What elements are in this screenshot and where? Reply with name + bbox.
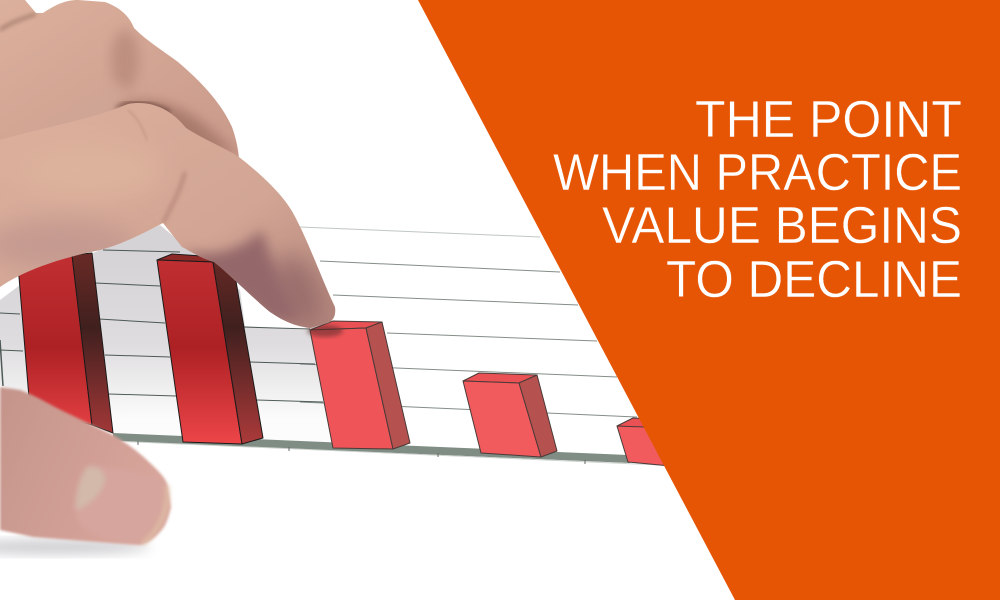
finger: pointing on chart [0, 103, 335, 335]
title: VALUE BEGINS [602, 197, 962, 255]
thumb nail tip [142, 485, 167, 544]
finger: upper knuckle [0, 0, 239, 158]
title: TO DECLINE [666, 251, 962, 309]
finger shadow on bar 3 [307, 325, 343, 337]
shaded paper under hand [0, 225, 333, 448]
baseline band [113, 433, 630, 463]
thumb [0, 387, 171, 545]
orange diagonal panel [418, 0, 1000, 600]
bar 4 [463, 373, 557, 457]
thumb nail lunula [76, 467, 105, 510]
bar 2 [157, 254, 263, 444]
grid lines [0, 227, 637, 417]
bar 1 [18, 253, 113, 433]
title [553, 91, 962, 309]
title: THE POINT [695, 91, 962, 149]
axis ticks [138, 441, 585, 464]
bar 5 [617, 418, 670, 466]
shadow under thumb [0, 540, 150, 554]
bar 3 [310, 321, 410, 449]
title: WHEN PRACTICE [553, 144, 962, 202]
thumb nail [75, 465, 168, 543]
hand [0, 0, 335, 554]
chart on paper [0, 225, 670, 466]
